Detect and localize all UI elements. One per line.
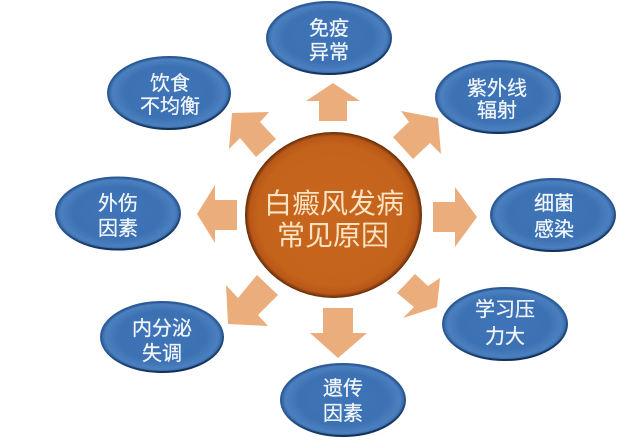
node: stress xyxy=(443,288,567,360)
node: ultraviolet: 辐射 xyxy=(477,99,517,122)
node: diet: 不均衡 xyxy=(140,95,200,118)
center circle xyxy=(245,132,422,298)
node: immune: 异常 xyxy=(309,41,349,64)
node: stress: 力大 xyxy=(485,325,525,348)
node: immune xyxy=(267,2,391,74)
node: heredity xyxy=(281,364,405,436)
arrow: up xyxy=(306,83,360,121)
arrow: lower right xyxy=(397,274,440,318)
node: heredity: 遗传 xyxy=(323,377,363,400)
arrow: upper left xyxy=(229,112,276,157)
node: immune: 免疫 xyxy=(309,17,349,40)
node: bacteria: 感染 xyxy=(534,218,574,241)
node: injury xyxy=(56,178,180,250)
arrow: lower left xyxy=(226,275,278,326)
node: heredity: 因素 xyxy=(323,402,363,425)
node: diet: 饮食 xyxy=(150,72,190,95)
node: endocrine: 内分泌 xyxy=(132,317,192,340)
arrow: upper right xyxy=(393,111,441,159)
node: injury: 因素 xyxy=(98,217,138,240)
node: endocrine xyxy=(101,302,223,372)
arrow: left xyxy=(197,185,237,243)
node: bacteria: 细菌 xyxy=(534,192,574,215)
node: endocrine: 失调 xyxy=(142,342,182,365)
node: bacteria xyxy=(491,179,615,251)
arrow: right xyxy=(433,187,477,247)
node: ultraviolet: 紫外线 xyxy=(467,77,527,100)
node: diet xyxy=(108,57,230,129)
arrow: down xyxy=(310,308,367,358)
center title: 白癜风发病 xyxy=(264,188,404,219)
node: injury: 外伤 xyxy=(98,192,138,215)
node: stress: 学习压 xyxy=(475,298,535,321)
node: ultraviolet xyxy=(436,61,560,133)
center title: 常见原因 xyxy=(277,220,389,251)
